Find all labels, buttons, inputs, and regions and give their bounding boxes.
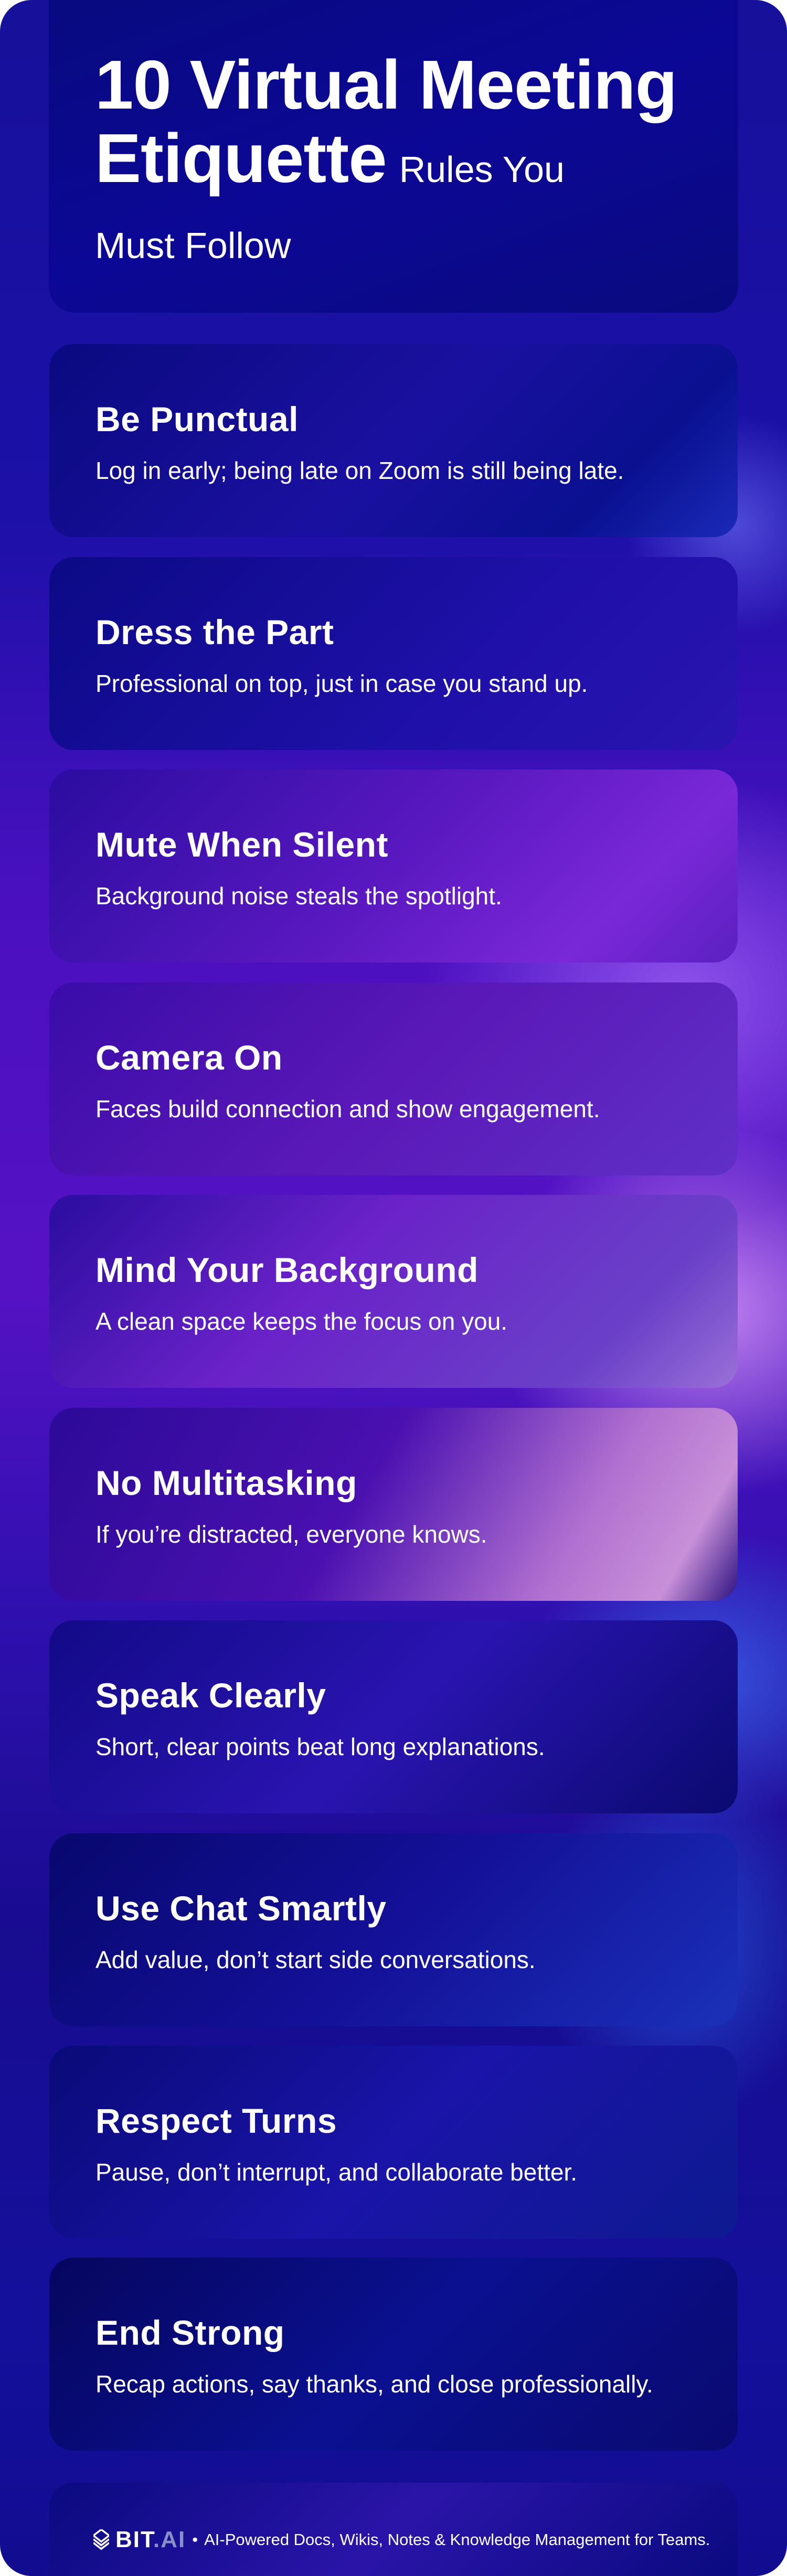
card 2 text: Professional on top, just in case you stand up.: [95, 670, 588, 697]
footer text: •: [192, 2530, 198, 2549]
card 5 text: A clean space keeps the focus on you.: [95, 1308, 507, 1335]
card 3 text: Background noise steals the spotlight.: [95, 882, 502, 910]
card 4 text: Faces build connection and show engagement.: [95, 1095, 600, 1123]
card 5: [49, 1195, 738, 1388]
card 9 text: Pause, don’t interrupt, and collaborate better.: [95, 2158, 577, 2186]
title: 10 Virtual Meeting: [95, 46, 677, 123]
title: Must Follow: [95, 225, 291, 266]
card 10: [49, 2258, 738, 2451]
card 10 text: Recap actions, say thanks, and close professionally.: [95, 2370, 653, 2398]
card 7: [49, 1620, 738, 1813]
card 6: [49, 1408, 738, 1601]
footer text: [93, 2527, 710, 2552]
card 1: [49, 344, 738, 537]
card 8: [49, 1833, 738, 2026]
footer text: AI-Powered Docs, Wikis, Notes & Knowledge Management for Teams.: [204, 2530, 710, 2549]
card 3: [49, 769, 738, 963]
footer panel: [49, 2483, 738, 2576]
title: Etiquette Rules You: [95, 120, 565, 197]
card 3 title: Mute When Silent: [95, 825, 388, 864]
icon: bit.ai logo: [93, 2529, 109, 2550]
card 7 text: Short, clear points beat long explanations.: [95, 1733, 545, 1760]
title: [95, 46, 677, 266]
card 8 text: Add value, don’t start side conversations.: [95, 1946, 536, 1973]
footer text: BIT.AI: [115, 2527, 186, 2552]
card 2: [49, 557, 738, 750]
card 1 text: Log in early; being late on Zoom is still being late.: [95, 457, 624, 484]
card 6 text: If you’re distracted, everyone knows.: [95, 1521, 487, 1548]
title panel: [49, 0, 738, 313]
card 6 title: No Multitasking: [95, 1463, 357, 1502]
card 5 title: Mind Your Background: [95, 1250, 478, 1289]
card 10 title: End Strong: [95, 2313, 285, 2352]
card 2 title: Dress the Part: [95, 613, 334, 651]
card 9: [49, 2046, 738, 2239]
card 1 title: Be Punctual: [95, 400, 299, 439]
card 4 title: Camera On: [95, 1038, 283, 1077]
card 9 title: Respect Turns: [95, 2101, 337, 2140]
card 4: [49, 982, 738, 1175]
card 8 title: Use Chat Smartly: [95, 1889, 387, 1928]
card 7 title: Speak Clearly: [95, 1676, 326, 1715]
